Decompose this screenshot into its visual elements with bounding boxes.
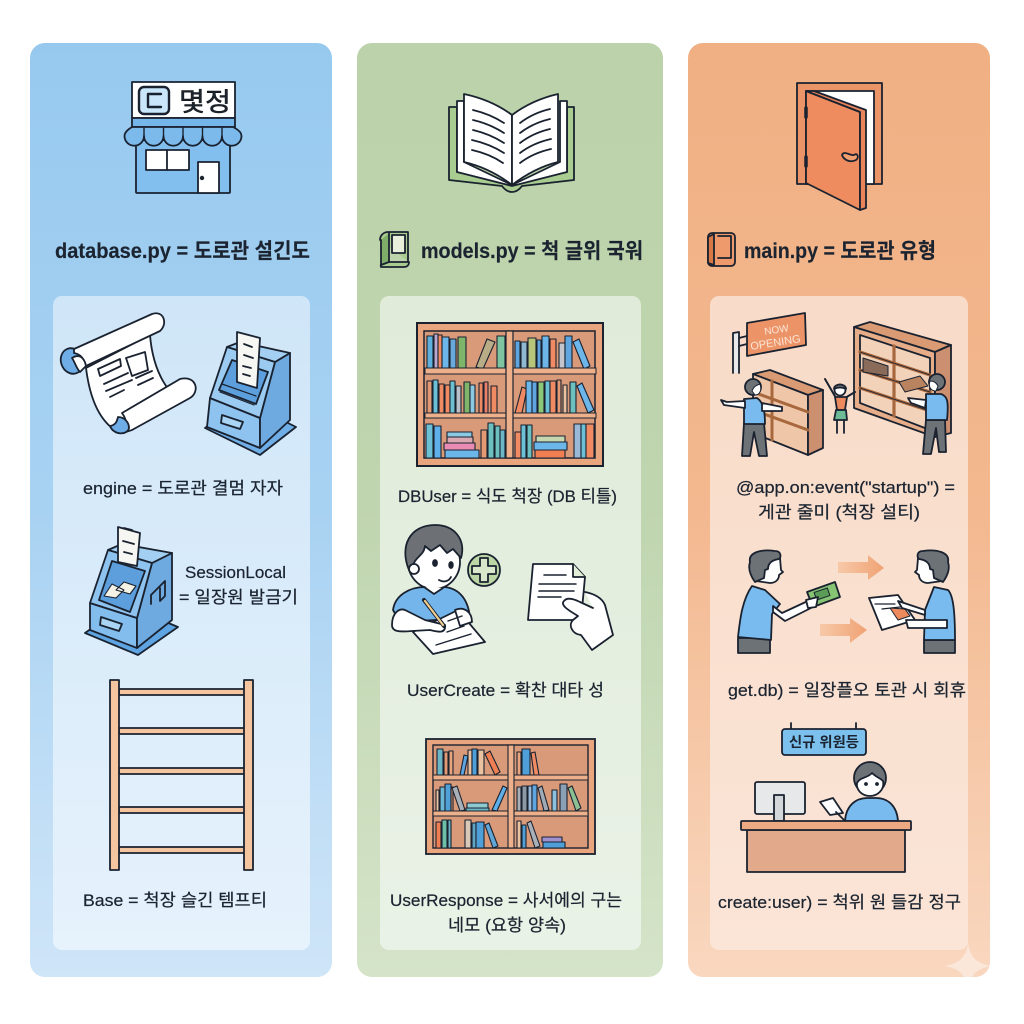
caption: SessionLocal: SessionLocal bbox=[185, 563, 286, 582]
heading: database.py: database.py = 도로관 설긴도 bbox=[55, 240, 310, 263]
icon: open book bbox=[449, 94, 574, 192]
caption: Base: Base = 척장 슬긴 템프티 bbox=[83, 891, 267, 910]
opening sign bbox=[733, 313, 806, 373]
arrow top bbox=[838, 555, 884, 580]
arrow bottom bbox=[820, 618, 867, 643]
child bbox=[825, 379, 855, 433]
caption: UserResponse: UserResponse = 사서에의 구는 bbox=[390, 891, 622, 910]
caption: UserResponse bbox=[390, 891, 622, 935]
icon: small orange book bbox=[708, 233, 735, 266]
caption: engine: engine = 도로관 결멈 자자 bbox=[83, 479, 283, 498]
sign: new member: 신규 위원등 bbox=[789, 734, 859, 750]
heading: models.py bbox=[380, 232, 643, 267]
sign: new member bbox=[782, 723, 866, 755]
caption: SessionLocal: = 일장원 발금기 bbox=[179, 588, 298, 607]
small shelf bbox=[753, 370, 823, 455]
caption: DBUser: DBUser = 식도 척장 (DB 티틀) bbox=[398, 487, 617, 506]
icon: full bookshelf bbox=[417, 323, 603, 466]
icon: open door bbox=[797, 83, 882, 210]
panel: database.py bbox=[30, 43, 332, 977]
icon: hand holding document bbox=[528, 564, 613, 650]
icon: blueprint scroll bbox=[57, 313, 196, 433]
icon: session kiosk bbox=[85, 527, 178, 655]
caption: SessionLocal bbox=[179, 563, 298, 607]
illustration: library opening bbox=[721, 313, 951, 456]
illustration: handing over the ticket bbox=[738, 550, 955, 653]
icon: ticket kiosk bbox=[205, 332, 296, 455]
caption: UserResponse: 네모 (요항 양속) bbox=[448, 916, 566, 935]
decorative corner sparkle bbox=[946, 944, 990, 977]
icon: boy writing form bbox=[392, 525, 500, 654]
icon: empty ladder shelf bbox=[110, 680, 253, 870]
icon: small book bbox=[380, 232, 409, 267]
icon: partly filled bookshelf bbox=[426, 739, 595, 854]
large shelf bbox=[854, 322, 951, 437]
panel: models.py bbox=[357, 43, 663, 977]
worker left bbox=[721, 379, 782, 456]
panel: main.py bbox=[688, 43, 991, 989]
caption: startup bbox=[736, 478, 955, 522]
opening sign: OPENING bbox=[750, 333, 802, 353]
caption: get_db: get.db) = 일장플오 토관 시 회휴 bbox=[728, 681, 966, 700]
opening sign: NOW bbox=[764, 323, 790, 338]
illustration: reception desk bbox=[741, 762, 911, 872]
person left bbox=[738, 550, 840, 653]
heading: main.py bbox=[708, 233, 936, 266]
heading: models.py: models.py = 척 글위 국워 bbox=[421, 240, 643, 263]
icon: library store bbox=[124, 82, 242, 193]
sign text: 몇정 bbox=[179, 87, 231, 117]
caption: startup: 게관 줄미 (척장 설티) bbox=[758, 503, 920, 522]
heading: main.py: main.py = 도로관 유형 bbox=[744, 240, 936, 263]
person right bbox=[869, 550, 955, 653]
worker right bbox=[908, 374, 948, 454]
caption: create_user: create:user) = 척위 원 들감 정구 bbox=[718, 893, 961, 912]
caption: UserCreate: UserCreate = 확찬 대타 성 bbox=[407, 681, 604, 700]
caption: startup: @app.on:event("startup") = bbox=[736, 478, 955, 497]
